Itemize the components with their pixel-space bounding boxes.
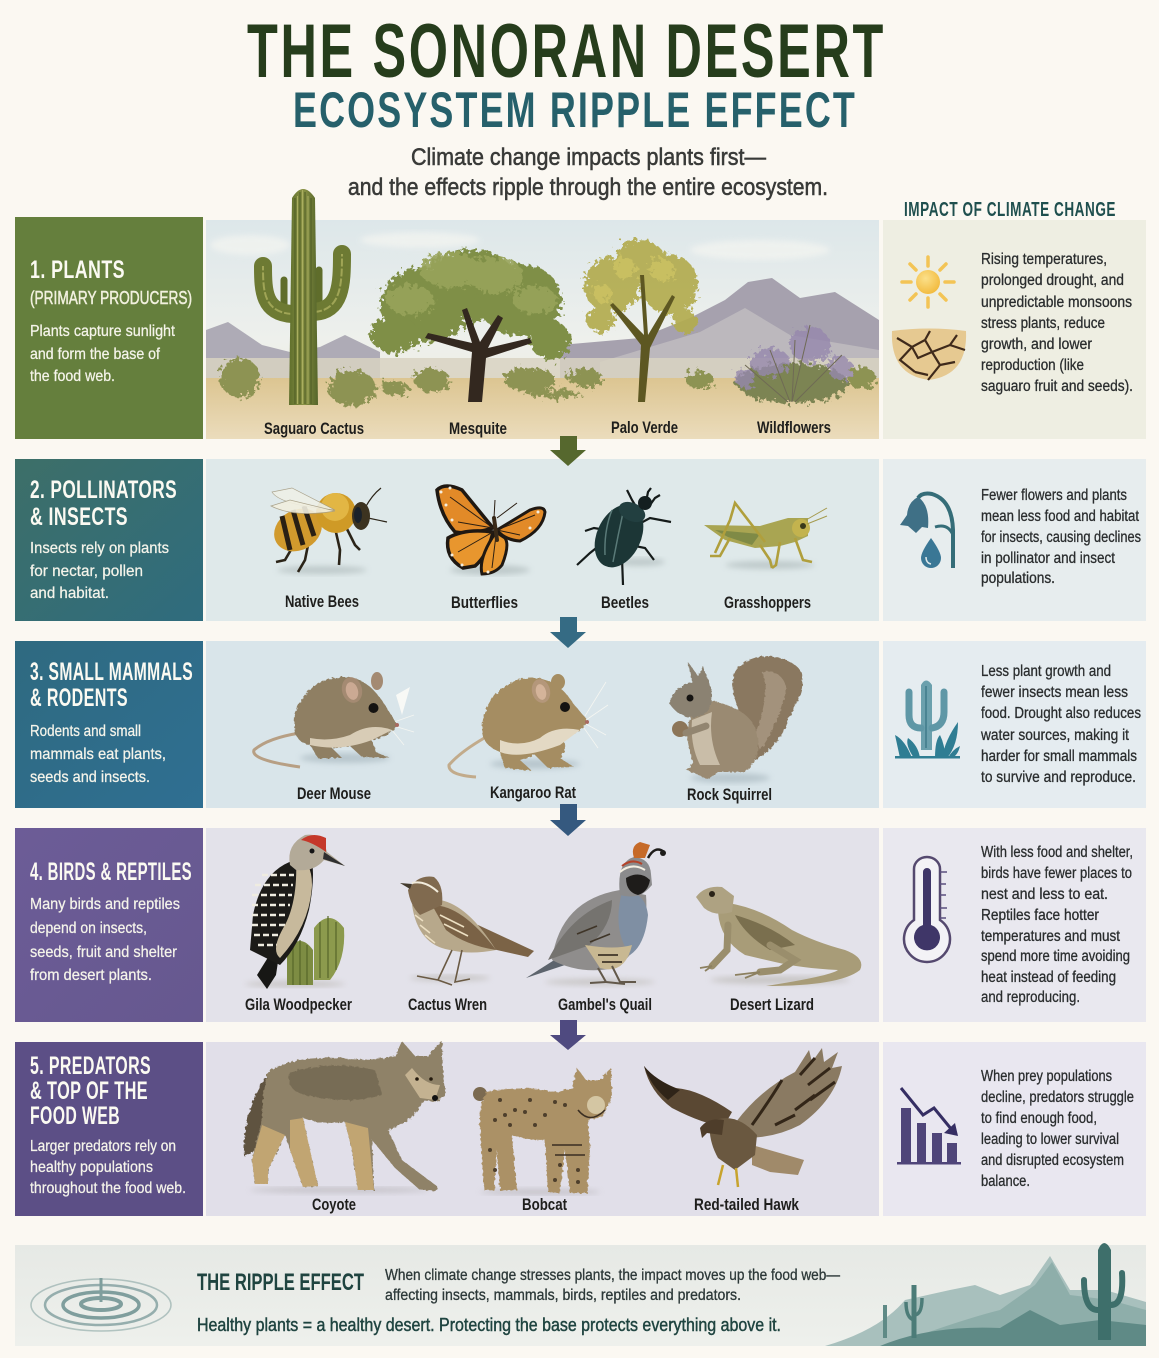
icon: butterfly: [437, 486, 545, 574]
insect labels: Butterflies: [451, 594, 518, 612]
impact panel 5: decline, predators struggle: [981, 1089, 1134, 1106]
icon: declining bar chart: [897, 1088, 961, 1164]
panel 1: plants: 1. PLANTS: [30, 256, 125, 284]
icon: deer mouse: [254, 672, 414, 767]
panel 2: pollinators and insects: 2. POLLINATORS: [30, 476, 177, 504]
row 4 scene: birds and reptiles: [206, 828, 879, 1022]
panel 5: predators and top of the food web: FOOD WEB: [30, 1102, 120, 1130]
impact panel 4: temperatures and must: [981, 928, 1121, 945]
icon: gambels quail: [526, 842, 666, 984]
impact panel 5: When prey populations: [981, 1068, 1112, 1085]
mammal labels: [297, 784, 772, 804]
predator labels: Bobcat: [522, 1196, 567, 1214]
impact panel 3: harder for small mammals: [981, 748, 1137, 765]
icon: grasshopper: [704, 503, 827, 568]
mammal labels: Deer Mouse: [297, 785, 371, 803]
impact panel 2: Fewer flowers and plants: [981, 487, 1127, 504]
insect labels: Native Bees: [285, 593, 359, 611]
impact panel 3: [883, 641, 1146, 808]
row 5 scene: predators: [206, 1041, 879, 1216]
panel 4: birds and reptiles: from desert plants.: [30, 967, 152, 984]
impact panel 1: unpredictable monsoons: [981, 294, 1132, 311]
impact panel 3: Less plant growth and: [981, 663, 1111, 680]
intro text: Climate change impacts plants first—: [411, 144, 766, 171]
arrow: birds to predators: [550, 1020, 586, 1050]
impact panel 5: to find enough food,: [981, 1110, 1097, 1127]
impact panel 5: balance.: [981, 1173, 1030, 1190]
impact panel 1: Rising temperatures,: [981, 251, 1107, 268]
impact panel 1: growth, and lower: [981, 336, 1092, 353]
ripple effect banner: Healthy plants = a healthy desert. Protecting the base protects everything above it.: [197, 1315, 781, 1335]
bird and reptile labels: [245, 996, 814, 1014]
impact panel 4: [883, 828, 1146, 1022]
impact panel 3: fewer insects mean less: [981, 684, 1128, 701]
icon: native bee: [266, 488, 387, 572]
impact panel 2: [883, 459, 1146, 621]
icon: kangaroo rat: [449, 674, 608, 777]
palo verde tree: [584, 240, 698, 402]
panel 3: small mammals and rodents: 3. SMALL MAMMALS: [30, 658, 193, 686]
insect labels: Grasshoppers: [724, 594, 811, 612]
impact panel 5: leading to lower survival: [981, 1131, 1119, 1148]
panel 3: small mammals and rodents: [15, 641, 203, 808]
plant labels: Saguaro Cactus: [264, 420, 364, 438]
icon: beetle: [577, 488, 671, 585]
plant labels: Wildflowers: [757, 419, 831, 437]
panel 1: plants: Plants capture sunlight: [30, 323, 175, 340]
panel 5: predators and top of the food web: throughout the food web.: [30, 1180, 186, 1197]
predator labels: Red-tailed Hawk: [694, 1196, 800, 1214]
mammal labels: Rock Squirrel: [687, 786, 772, 804]
icon: cactus wren: [400, 877, 534, 985]
panel 4: birds and reptiles: [15, 828, 203, 1022]
wildflowers: [735, 325, 852, 403]
panel 4: birds and reptiles: seeds, fruit and shelter: [30, 944, 178, 961]
panel 1: plants: the food web.: [30, 368, 115, 385]
row 1 scene: plants: [206, 189, 879, 439]
insect labels: [285, 593, 811, 612]
panel 2: pollinators and insects: [15, 459, 203, 621]
impact panel 4: heat instead of feeding: [981, 969, 1116, 986]
insect labels: Beetles: [601, 594, 649, 612]
panel 1: plants: (PRIMARY PRODUCERS): [30, 288, 192, 308]
bird and reptile labels: Gambel's Quail: [558, 996, 652, 1014]
panel 3: small mammals and rodents: & RODENTS: [30, 684, 128, 712]
ripple effect banner: THE RIPPLE EFFECT: [197, 1269, 364, 1296]
mesquite tree: [370, 249, 570, 402]
icon: desert lizard: [696, 887, 861, 986]
subtitle: ECOSYSTEM RIPPLE EFFECT: [293, 82, 857, 138]
panel 5: predators and top of the food web: healthy populations: [30, 1159, 153, 1176]
mountains: [206, 322, 380, 385]
impact panel 4: birds have fewer places to: [981, 865, 1132, 882]
panel 2: pollinators and insects: and habitat.: [30, 585, 109, 602]
panel 3: small mammals and rodents: mammals eat plants,: [30, 746, 166, 763]
icon: thermometer: [904, 857, 950, 962]
panel 2: pollinators and insects: for nectar, pollen: [30, 563, 143, 580]
impact panel 1: reproduction (like: [981, 357, 1084, 374]
impact panel 1: prolonged drought, and: [981, 272, 1124, 289]
impact panel 5: and disrupted ecosystem: [981, 1152, 1124, 1169]
plant labels: Mesquite: [449, 420, 507, 438]
icon: coyote: [244, 1041, 446, 1191]
desert silhouette: [825, 1243, 1146, 1346]
icon: water ripple: [31, 1278, 171, 1331]
impact panel 3: water sources, making it: [980, 727, 1130, 744]
predator labels: Coyote: [312, 1196, 356, 1214]
row 3 scene: small mammals: [206, 641, 879, 808]
panel 5: predators and top of the food web: 5. PREDATORS: [30, 1052, 151, 1080]
intro text: [348, 144, 828, 201]
icon: cracked earth: [892, 328, 966, 380]
panel 3: small mammals and rodents: Rodents and small: [30, 723, 141, 740]
icon: rock squirrel: [669, 656, 803, 779]
panel 1: plants: [15, 217, 203, 439]
saguaro cactus: [263, 189, 342, 405]
impact panel 4: With less food and shelter,: [981, 844, 1133, 861]
panel 4: birds and reptiles: depend on insects,: [30, 920, 147, 937]
ripple effect banner: [15, 1243, 1146, 1346]
predator labels: [312, 1196, 800, 1214]
icon: bobcat: [473, 1068, 612, 1193]
background shrubs: [220, 358, 876, 406]
icon: gila woodpecker on cactus: [250, 835, 345, 989]
mammal labels: Kangaroo Rat: [490, 784, 576, 802]
ripple effect banner: affecting insects, mammals, birds, reptiles and predators.: [385, 1287, 741, 1304]
panel 2: pollinators and insects: Insects rely on plants: [30, 540, 169, 557]
panel 1: plants: and form the base of: [30, 346, 160, 363]
impact panel 4: and reproducing.: [981, 989, 1080, 1006]
impact panel 5: [883, 1042, 1146, 1216]
panel 2: pollinators and insects: & INSECTS: [30, 503, 128, 531]
impact panel 2: in pollinator and insect: [981, 550, 1116, 567]
bird and reptile labels: Desert Lizard: [730, 996, 814, 1014]
impact panel 4: nest and less to eat.: [981, 886, 1108, 903]
plant labels: Palo Verde: [611, 419, 678, 437]
bird and reptile labels: Cactus Wren: [408, 996, 487, 1014]
icon: sun: [902, 257, 954, 307]
icon: wilting flower and water drop: [900, 494, 953, 568]
impact panel 2: populations.: [981, 570, 1055, 587]
panel 4: birds and reptiles: Many birds and reptiles: [30, 896, 180, 913]
impact panel 4: Reptiles face hotter: [981, 907, 1099, 924]
ripple effect banner: When climate change stresses plants, the impact moves up the food web—: [385, 1267, 840, 1284]
arrow: mammals to birds: [550, 804, 586, 836]
impact panel 1: [883, 220, 1146, 439]
arrow: plants to insects: [550, 436, 586, 466]
icon: red-tailed hawk: [644, 1048, 842, 1187]
arrow: insects to mammals: [550, 617, 586, 648]
row 2 scene: insects: [206, 459, 879, 621]
intro text: and the effects ripple through the entire ecosystem.: [348, 174, 828, 201]
plant labels: [264, 419, 831, 438]
impact panel 1: stress plants, reduce: [981, 315, 1105, 332]
panel 3: small mammals and rodents: seeds and insects.: [30, 769, 150, 786]
icon: stressed cactus: [895, 680, 960, 758]
impact panel 3: to survive and reproduce.: [981, 769, 1136, 786]
panel 4: birds and reptiles: 4. BIRDS & REPTILES: [30, 858, 192, 886]
panel 5: predators and top of the food web: Larger predators rely on: [30, 1138, 176, 1155]
panel 5: predators and top of the food web: [15, 1042, 203, 1216]
impact panel 1: saguaro fruit and seeds).: [981, 378, 1133, 395]
panel 5: predators and top of the food web: & TOP OF THE: [30, 1077, 148, 1105]
impact panel 4: spend more time avoiding: [981, 948, 1130, 965]
bird and reptile labels: Gila Woodpecker: [245, 996, 352, 1014]
